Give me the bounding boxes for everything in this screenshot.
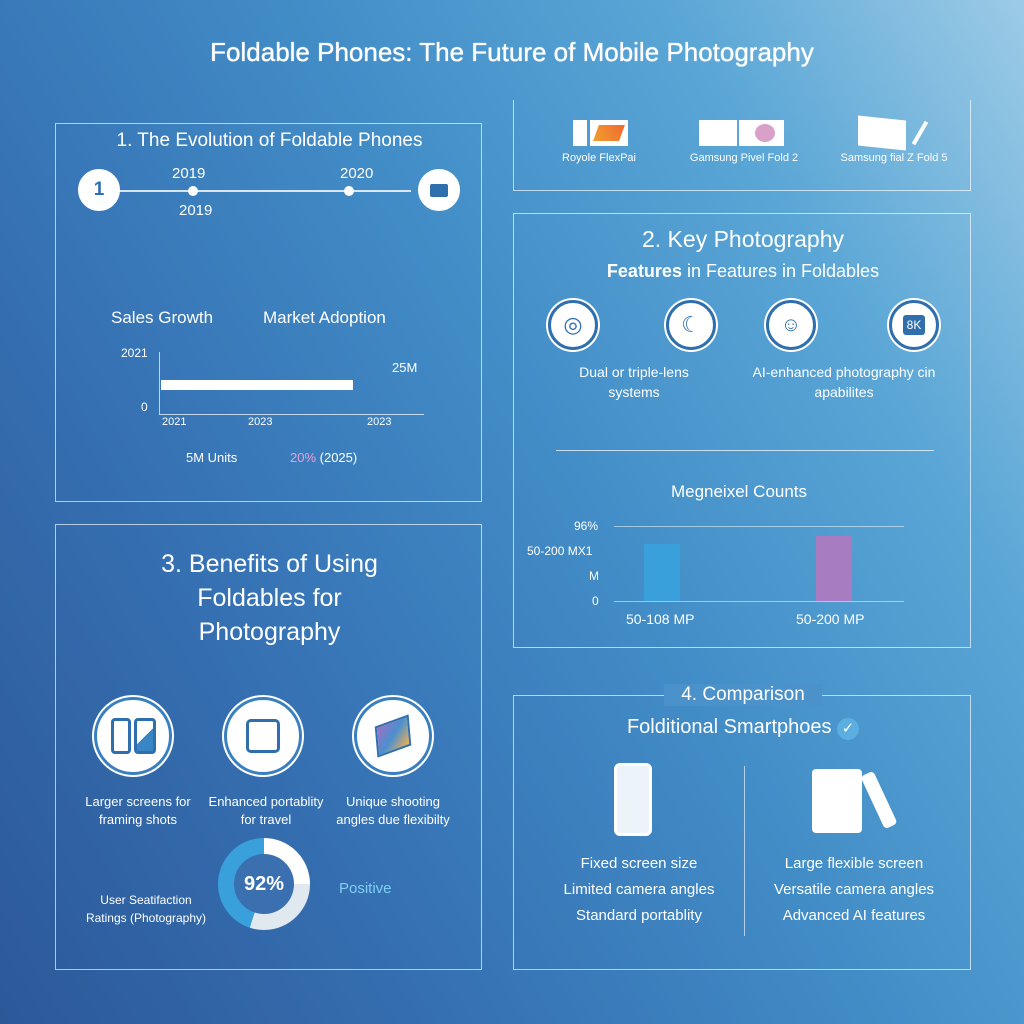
timeline: 2019 [172,165,205,182]
model 3 [840,116,948,164]
panel: phone models [513,100,971,191]
megapixel chart: 50-108 MP [626,611,694,627]
bar chart: sales: 2023 [367,416,391,428]
model 2: Gamsung Pivel Fold 2 [690,152,798,164]
megapixel chart: 96% [574,519,598,533]
timeline [78,165,460,219]
panel: benefits: Ratings (Photography) [86,911,206,925]
bar chart: sales: 0 [141,400,148,414]
panel: key features: 8K [907,318,921,332]
heading 3 [161,550,378,646]
foldable icon [812,769,862,833]
megapixel chart: 0 [592,594,599,608]
bar chart: sales: Sales Growth [111,308,213,327]
phone icon [614,763,652,836]
icons [548,300,598,350]
bar chart: sales: 2023 [248,416,272,428]
heading 3: 3. Benefits of Using [161,550,378,578]
timeline: 2020 [340,165,373,182]
panel: comparison: Versatile camera angles [774,881,934,898]
panel: benefits: User Seatifaction [100,893,192,907]
icons: ◎ [563,312,583,337]
panel: benefits: Unique shooting angles due flexibilty [336,794,450,827]
heading 2: 2. Key Photography [642,226,844,252]
model 1 [562,120,636,164]
bar chart: sales: 25M [392,360,417,375]
panel: key features [513,213,971,648]
megapixel chart: Megneixel Counts [671,482,807,501]
panel: comparison: Large flexible screen [785,855,923,872]
bar chart: sales: 2021 [162,416,186,428]
panel: key features: Features in Features in Foldables [607,261,879,281]
panel: benefits: Enhanced portablity for travel [209,794,323,827]
panel: comparison: Folditional Smartphoes [627,716,832,738]
model 1: Royole FlexPai [562,152,636,164]
panel: key features: ☾ [681,312,701,337]
bar chart: sales: 2021 [121,346,148,360]
donut chart: 92% [244,872,284,894]
panel: key features: ☺ [781,314,801,336]
model 3: Samsung fial Z Fold 5 [840,152,948,164]
megapixel chart: M [589,569,599,583]
panel: key features: AI-enhanced photography cin apabilites [753,364,935,400]
megapixel chart: 50-200 MX1 [527,544,592,558]
megapixel chart: 50-200 MP [796,611,864,627]
panel: benefits: Positive [339,880,392,897]
timeline: 1 [94,179,104,200]
panel: comparison: Fixed screen size [581,855,697,872]
benefit icons [94,697,172,775]
panel: comparison: ✓ [842,720,854,737]
title: Foldable Phones: The Future of Mobile Photography [210,37,814,67]
heading 3: Photography [199,618,340,646]
panel: comparison: Standard portablity [576,907,702,924]
heading 3: Foldables for [197,584,342,612]
heading 1: 1. The Evolution of Foldable Phones [117,130,422,151]
donut chart [218,838,310,930]
panel: comparison: Advanced AI features [783,907,925,924]
bar chart: sales: Market Adoption [263,308,386,327]
panel: key features: Dual or triple-lens systems [579,364,689,400]
bar chart: sales: 5M Units [186,450,237,465]
bar chart: sales [111,308,424,465]
panel: benefits [55,524,482,970]
panel: comparison [513,695,971,970]
bar chart: sales: 20% (2025) [290,450,357,465]
panel: benefits: Larger screens for framing shots [85,794,191,827]
heading 4: 4. Comparison [681,684,805,705]
panel: evolution [55,123,482,502]
timeline: 2019 [179,202,212,219]
model 2 [690,120,798,164]
panel: comparison: Limited camera angles [564,881,714,898]
megapixel chart [527,482,904,627]
